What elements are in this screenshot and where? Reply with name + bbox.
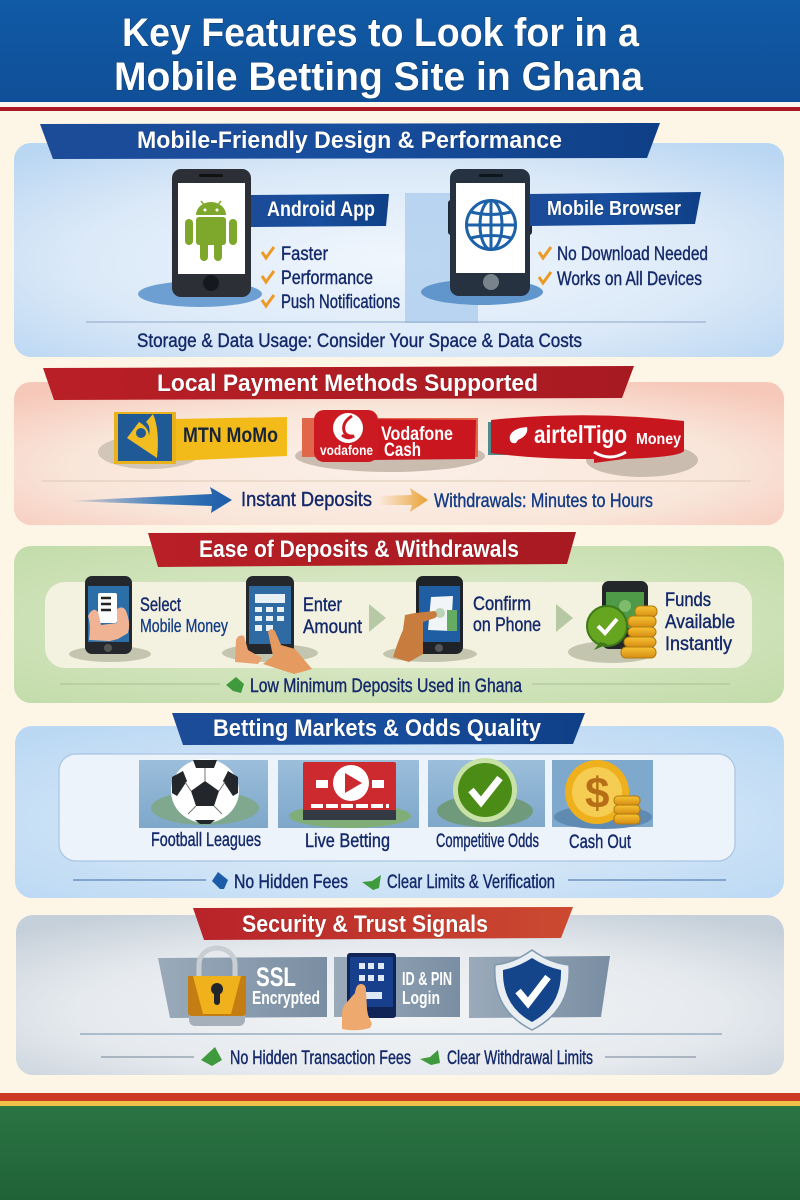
title: Mobile Betting Site in Ghana	[114, 55, 644, 99]
card: cash out: Cash Out	[569, 832, 632, 853]
footer stripes	[0, 1093, 800, 1200]
logo: MTN MoMo: MTN MoMo	[183, 424, 278, 447]
logo: Vodafone Cash: Cash	[384, 440, 421, 461]
header banner	[0, 0, 800, 111]
step 4: funds available: Instantly	[665, 634, 732, 655]
section heading ribbon	[40, 123, 660, 159]
step 4: funds available: Funds	[665, 590, 711, 611]
card: cash out: $	[585, 769, 609, 818]
section heading ribbon: Ease of Deposits & Withdrawals	[199, 536, 519, 563]
trust tile: ID and PIN	[334, 953, 460, 1030]
note: fees and limits: Clear Limits & Verification	[387, 872, 555, 893]
browser feature list: Works on All Devices	[557, 269, 702, 290]
storage note: Storage & Data Usage: Consider Your Space & Data Costs	[137, 331, 582, 352]
step 1: select mobile money	[69, 576, 228, 662]
note: transaction fees and limits	[201, 1047, 593, 1069]
trust tile: SSL: Encrypted	[252, 988, 320, 1008]
mobile browser ribbon	[530, 192, 701, 226]
label: instant deposits: Instant Deposits	[241, 489, 372, 511]
step 4: funds available	[568, 581, 735, 663]
panel: security and trust	[16, 907, 784, 1075]
title	[114, 11, 644, 99]
mobile browser ribbon: Mobile Browser	[547, 198, 681, 220]
note: transaction fees and limits: No Hidden Transaction Fees	[230, 1048, 411, 1069]
step 3: confirm on phone: on Phone	[473, 615, 541, 636]
arrow: step 3 to 4	[556, 604, 573, 632]
card: competitive odds: Competitive Odds	[436, 831, 539, 852]
panel: ease of deposits and withdrawals	[14, 532, 784, 703]
panel: local payment methods	[14, 366, 784, 525]
step 2: enter amount	[222, 576, 363, 674]
arrow: instant deposits	[66, 487, 232, 513]
card: live betting	[278, 760, 419, 852]
icon: browser phone	[421, 169, 543, 305]
card: competitive odds	[428, 758, 545, 852]
android feature list: Push Notifications	[281, 292, 400, 313]
card: live betting: Live Betting	[305, 831, 390, 852]
icon: android phone	[138, 169, 262, 307]
card: football leagues: Football Leagues	[151, 830, 261, 851]
note: transaction fees and limits: Clear Withdrawal Limits	[447, 1048, 593, 1069]
logo: Vodafone Cash	[295, 410, 485, 472]
panel: betting markets and odds	[15, 713, 784, 898]
logo: Vodafone Cash: vodafone	[320, 442, 373, 458]
browser feature list: No Download Needed	[557, 244, 708, 265]
section heading ribbon	[193, 907, 573, 940]
step 2: enter amount: Amount	[303, 617, 363, 638]
note: low minimum deposits: Low Minimum Deposits Used in Ghana	[250, 676, 522, 697]
card: football leagues	[139, 759, 268, 851]
step 1: select mobile money: Mobile Money	[140, 616, 228, 636]
section heading ribbon: Mobile-Friendly Design & Performance	[137, 127, 562, 154]
trust tile: SSL	[158, 948, 327, 1026]
card: cash out	[552, 760, 653, 853]
section heading ribbon	[148, 532, 576, 567]
trust tile: ID and PIN: ID & PIN	[402, 969, 452, 989]
step 4: funds available: Available	[665, 612, 735, 633]
arrow: withdrawals	[378, 488, 428, 512]
panel: mobile-friendly design	[14, 123, 784, 357]
browser feature list	[539, 244, 708, 290]
title: Key Features to Look for in a	[122, 11, 640, 55]
step 1: select mobile money: Select	[140, 595, 182, 616]
section heading ribbon: Local Payment Methods Supported	[157, 370, 538, 397]
logo: AirtelTigo Money	[488, 415, 698, 477]
logo: Vodafone Cash: Vodafone	[381, 424, 453, 445]
step 3: confirm on phone: Confirm	[473, 594, 531, 615]
step 3: confirm on phone	[383, 576, 541, 662]
note: fees and limits: No Hidden Fees	[234, 872, 348, 893]
trust tile: shield	[469, 950, 610, 1030]
step 2: enter amount: Enter	[303, 595, 343, 616]
note: fees and limits	[212, 872, 555, 893]
trust tile: ID and PIN: Login	[402, 988, 440, 1008]
section heading ribbon	[43, 366, 634, 400]
section heading ribbon: Betting Markets & Odds Quality	[213, 715, 542, 742]
logo: AirtelTigo Money: airtelTigo	[534, 421, 627, 449]
section heading ribbon: Security & Trust Signals	[242, 911, 488, 938]
arrow: step 2 to 3	[369, 604, 386, 632]
logo: MTN MoMo	[98, 412, 287, 469]
android feature list	[262, 244, 400, 313]
android feature list: Faster	[281, 244, 329, 265]
trust tile: SSL: SSL	[256, 962, 296, 992]
android app ribbon	[251, 194, 389, 227]
divider column	[405, 193, 478, 323]
label: withdrawals: Withdrawals: Minutes to Hours	[434, 491, 653, 512]
steps strip	[45, 576, 752, 674]
logo: AirtelTigo Money: Money	[636, 431, 681, 448]
android app ribbon: Android App	[267, 198, 375, 221]
market cards strip	[59, 754, 735, 861]
android feature list: Performance	[281, 268, 373, 289]
